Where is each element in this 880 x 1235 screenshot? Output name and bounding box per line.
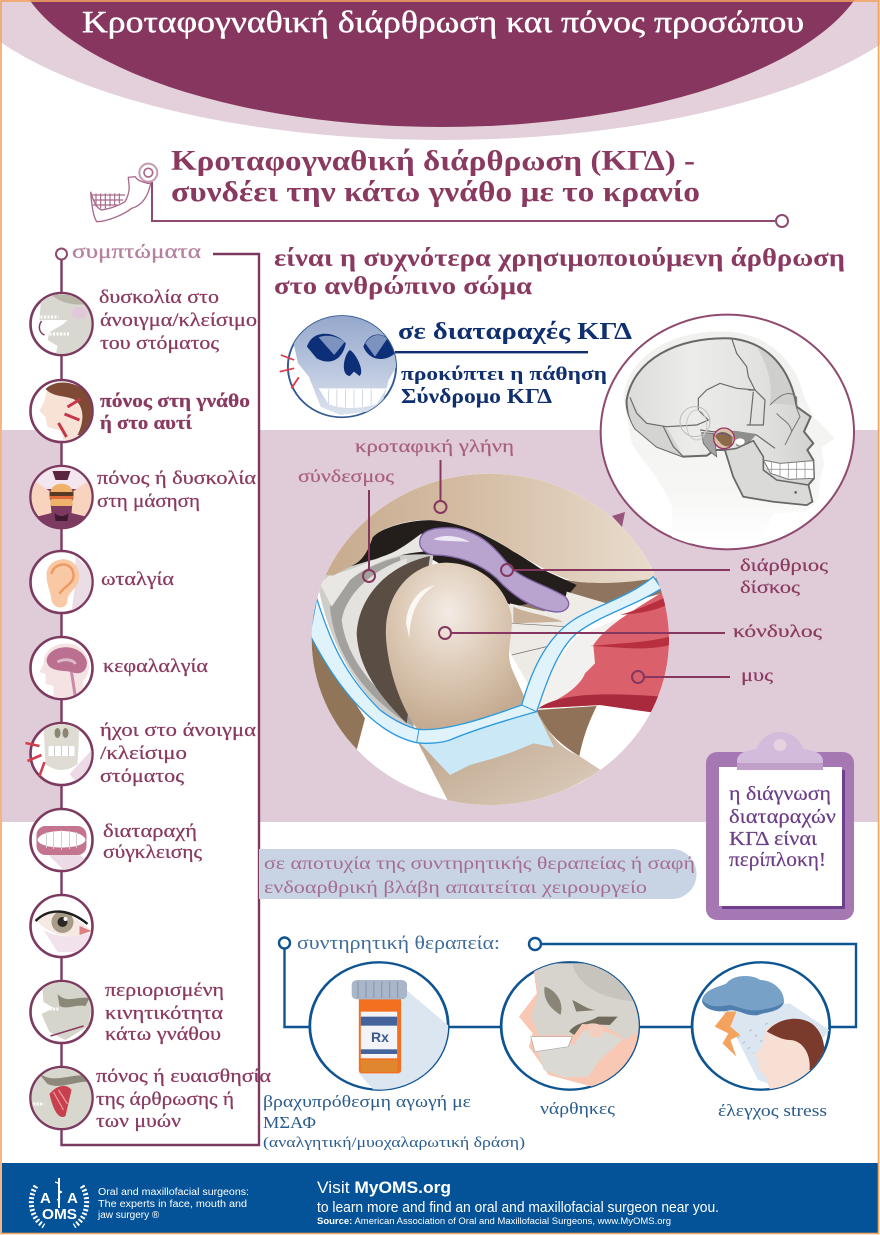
orbit [770,393,800,445]
symptom 3 [30,465,256,531]
symptom 10: των μυών [96,1111,181,1132]
ear rings [680,407,710,437]
symptom 6 [26,720,256,787]
symptom 6: ήχοι στο άνοιγμα [100,720,256,741]
callout: surgery pill: σε αποτυχία της συντηρητικής θεραπείας ή σαφή [264,853,695,873]
tagline [97,1187,249,1221]
symptom 6: στόματος [100,766,185,787]
joint highlight [714,428,734,449]
label: Rx: Rx [371,1029,389,1045]
cranium [627,338,814,505]
tagline: jaw surgery ® [97,1210,160,1221]
symptom 2: ή στο αυτί [100,413,192,434]
muscle [538,592,670,713]
icon: blue skull [280,307,398,417]
symptom 4 [30,551,174,613]
header arc: dark [12,0,872,127]
therapy labels: (αναλγητική/μυοχαλαρωτική δράση) [263,1135,525,1151]
conservative therapy heading: συντηρητική θεραπεία: [297,933,500,954]
callout: TMJ disorders heading: Σύνδρομο ΚΓΔ [401,384,552,408]
right brown below [537,706,597,756]
callout: surgery pill [259,849,696,899]
forehead shade [757,347,795,405]
label: articular disc: δίσκος [740,577,800,597]
callout: clipboard: περίπλοκη! [729,849,826,871]
label: articular disc [740,555,828,597]
symptom 2 [30,380,250,442]
logo [31,1178,87,1226]
logo: OMS [42,1206,77,1223]
temporal bone lower shade [628,398,683,457]
pointer: ligament [363,490,375,582]
fossa bone [326,474,656,583]
pointer: condyle [439,627,725,639]
symptom 10: της άρθρωσης ή [96,1089,234,1110]
callout: clipboard: διαταραχών [729,806,836,828]
symptom 1: του στόματος [100,333,220,354]
callout: clipboard: ΚΓΔ είναι [729,828,818,850]
symptom 9 [30,980,224,1045]
visit text: Visit MyOMS.org [317,1178,451,1197]
symptom 5: κεφαλαλγία [103,656,208,677]
therapy labels: ΜΣΑΦ [263,1113,316,1132]
statement text [274,245,845,300]
pointer: disc [501,564,730,576]
symptom 1 [30,287,257,356]
white ligament [320,533,423,607]
symptom 6: /κλείσιμο [100,743,187,764]
left outer brown [312,634,365,750]
conservative therapy connector [284,944,856,1027]
symptom 7: διαταραχή [103,821,197,842]
tendons white [509,603,574,684]
anatomy circle: joint detail [307,467,673,810]
label: articular disc: διάρθριος [740,555,828,575]
black cavity [330,520,577,607]
pointer: temporal fossa [434,460,446,513]
grey capsule [317,554,433,733]
subtitle heading: συνδέει την κάτω γνάθο με το κρανίο [171,176,700,208]
callout: surgery pill: ενδοαρθρική βλάβη απαιτείται χειρουργείο [264,877,647,897]
callout: TMJ disorders heading: σε διαταραχές ΚΓΔ [398,319,632,345]
visit text: to learn more and find an oral and maxillofacial surgeon near you. [317,1200,719,1216]
logo: A [67,1190,78,1207]
head silhouette [623,331,835,543]
right white muscle tendon [538,616,624,708]
callout: TMJ disorders heading: προκύπτει η πάθηση [401,364,607,385]
logo: A [40,1190,51,1207]
title: Κροταφογναθική διάρθρωση και πόνος προσώπου [82,4,804,39]
therapy labels: νάρθηκες [540,1099,615,1118]
arrow: toward skull inset [612,512,625,527]
inset: skull profile [601,315,854,549]
header arc: light [0,0,880,140]
tagline: Oral and maxillofacial surgeons: [98,1187,249,1198]
articular disc [420,528,569,612]
therapy labels: έλεγχος stress [718,1101,827,1120]
therapy: stress control [692,962,830,1090]
statement text: είναι η συχνότερα χρησιμοποιούμενη άρθρωση [274,245,845,272]
condyle [386,563,525,730]
therapy labels: βραχυπρόθεσμη αγωγή με [263,1092,471,1111]
subtitle heading: Κροταφογναθική διάρθρωση (ΚΓΔ) - [171,145,695,177]
symptoms heading: συμπτώματα [72,241,202,263]
therapy labels [263,1092,827,1151]
visit text: Source: American Association of Oral and Maxillofacial Surgeons, www.MyOMS.org [317,1216,671,1226]
symptom 4: ωταλγία [101,569,174,590]
symptom 1: δυσκολία στο [99,287,219,308]
symptoms frame lines [62,254,259,1145]
label: ligament: σύνδεσμος [298,466,394,486]
therapy: medication [310,962,450,1093]
panel: symptoms white column [62,254,259,1145]
callout: clipboard: η διάγνωση [729,783,831,805]
footer [2,1163,878,1234]
mandible [725,441,812,505]
label: temporal fossa: κροταφική γλήνη [355,436,514,456]
symptom 10: πόνος ή ευαισθησία [96,1066,271,1087]
symptom 3: στη μάσηση [97,491,200,512]
symptom 1: άνοιγμα/κλείσιμο [100,310,257,331]
symptom 8: eye icon [30,895,92,957]
brown band beneath fossa [519,574,662,612]
statement text: στο ανθρώπινο σώμα [274,273,532,300]
symptom 7 [30,809,203,871]
label: muscle: μυς [741,665,773,685]
symptom 7: σύγκλεισης [103,842,203,863]
blue capsule band [310,577,662,743]
label: condyle: κόνδυλος [733,621,822,641]
teeth [763,460,814,479]
zygomatic arch and joint base [700,430,775,448]
subtitle heading [171,145,700,208]
mauve background band [2,430,878,822]
symptom 9: περιορισμένη [105,980,224,1001]
symptom 3: πόνος ή δυσκολία [97,468,256,489]
icon: jaw with connector line [91,164,788,227]
visit text [317,1178,719,1226]
pointer: muscle [632,671,730,683]
symptom 9: κινητικότητα [105,1003,223,1024]
symptom 9: κάτω γνάθου [105,1024,221,1045]
callout: clipboard [706,732,854,920]
callout: TMJ disorders heading [395,319,632,408]
therapy: splints [501,962,639,1090]
conservative therapy heading [279,933,541,954]
symptom 10 [30,1066,271,1132]
neck [418,712,602,810]
symptom 2: πόνος στη γνάθο [100,391,250,412]
sutures [630,338,765,457]
symptom 5 [30,637,208,700]
tagline: The experts in face, mouth and [98,1199,247,1210]
